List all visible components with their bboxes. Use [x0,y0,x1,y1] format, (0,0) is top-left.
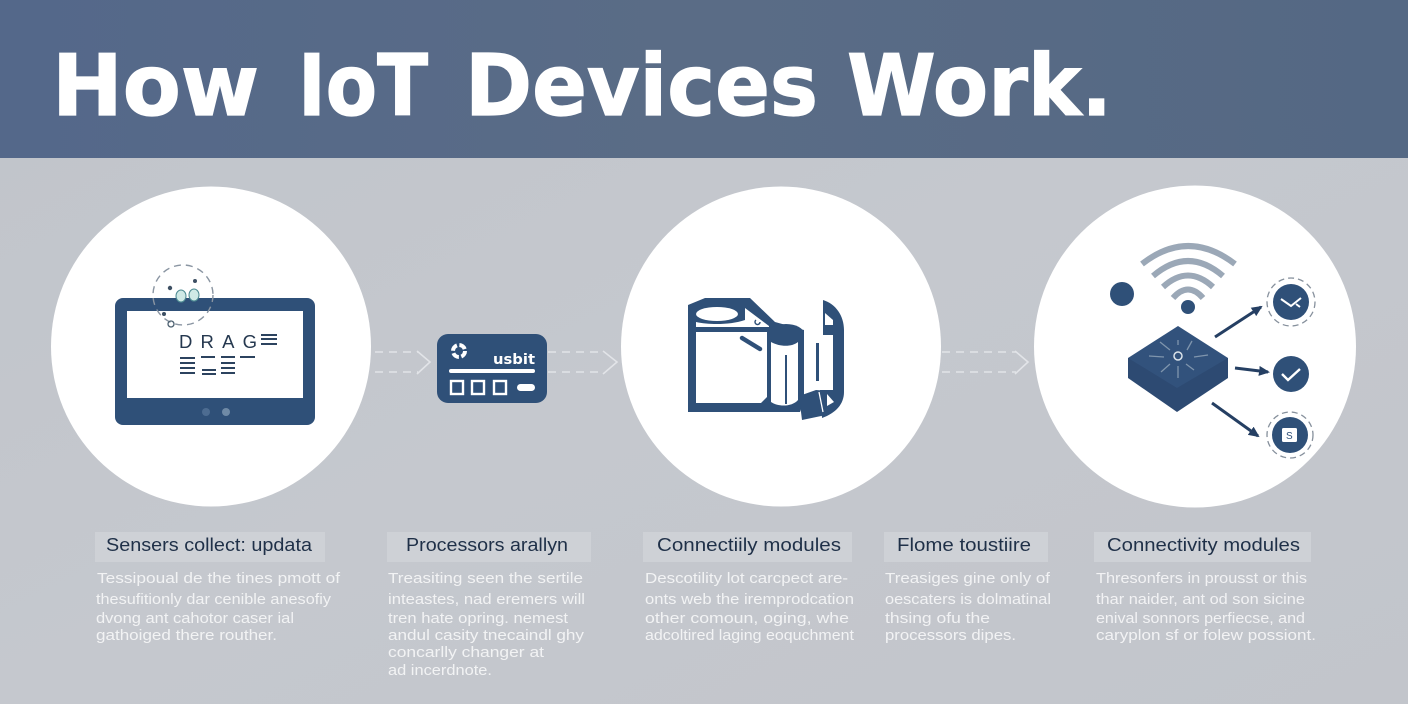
icon: processor card [437,334,547,403]
step 5 description: Thresonfers in prousst or this [1096,571,1307,587]
header band [0,0,1408,158]
step 5 description: enival sonnors perfiecse, and [1096,611,1305,627]
step 3: connectivity: Connectiily modules [657,535,841,555]
step 4: frame [884,532,1051,644]
icon: mail output [1267,278,1315,326]
step 3 description [645,571,854,644]
icon: check output [1273,356,1309,392]
step 2 description: tren hate opring. nemest [388,611,568,627]
title: Devices [465,37,818,136]
step 1 description: thesufitionly dar cenible anesofiy [96,592,332,608]
step 2 description: concarlly changer at [388,645,544,661]
step 4 description: Treasiges gine only of [885,571,1051,587]
arrows: chip to outputs [1212,307,1268,436]
step 2: processors: Processors arallyn [406,535,568,555]
icon: chip [1128,326,1228,412]
step 5: connectivity: Connectivity modules [1107,535,1300,555]
step 3 description: Descotility lot carcpect are- [645,571,848,587]
step 5 description [1096,571,1316,644]
step 2 description: inteastes, nad eremers will [388,592,585,608]
step 2 description: andul casity tnecaindl ghy [388,628,585,644]
step 2 description [388,571,585,679]
arrow: sensor to processor [375,351,430,374]
icon: tablet with sensor [115,265,315,425]
step 4 description: processors dipes. [885,628,1016,644]
icon: screen output: S [1286,431,1293,442]
title: Work. [847,37,1112,136]
step 1: sensors [95,532,341,644]
step 2 description: ad incerdnote. [388,663,492,679]
arrow: processor to connectivity [548,351,617,374]
title [52,37,1112,136]
step 4 description: thsing ofu the [885,611,990,627]
step 1 description: Tessipoual de the tines pmott of [97,571,341,587]
step 3 description: onts web the iremprodcation [645,592,854,608]
step 1 description: dvong ant cahotor caser ial [96,611,294,627]
panel: sensor circle [51,186,371,506]
panel: connectivity circle [621,186,941,506]
step 5 description: thar naider, ant od son sicine [1096,592,1305,608]
step 4 description: oescaters is dolmatinal [885,592,1051,608]
step 1 description [96,571,341,644]
title: IoT [298,37,428,136]
icon: screen output [1267,412,1313,458]
icon: processor card: usbit [493,352,535,368]
step 4 description [885,571,1051,644]
step 3 description: adcoltired laging eoquchment [645,628,854,644]
icon: tablet with sensor: DRAG [179,331,257,352]
step 5 description: caryplon sf or folew possiont. [1096,628,1316,644]
icon: wifi signal [1142,246,1235,314]
step 2: processors [387,532,591,679]
step 1 description: gathoiged there routher. [96,628,277,644]
step 1: sensors: Sensers collect: updata [106,535,313,555]
panel: output circle [1034,186,1356,508]
icon: status dot [1110,282,1134,306]
step 5: connectivity [1094,532,1316,644]
step 3: connectivity [643,532,854,644]
step 4: frame: Flome toustiire [897,535,1031,555]
title: How [52,37,259,136]
step 2 description: Treasiting seen the sertile [388,571,583,587]
step 3 description: other comoun, oging, whe [645,611,849,627]
arrow: connectivity to output [942,351,1028,374]
icon: module hardware [688,298,844,420]
